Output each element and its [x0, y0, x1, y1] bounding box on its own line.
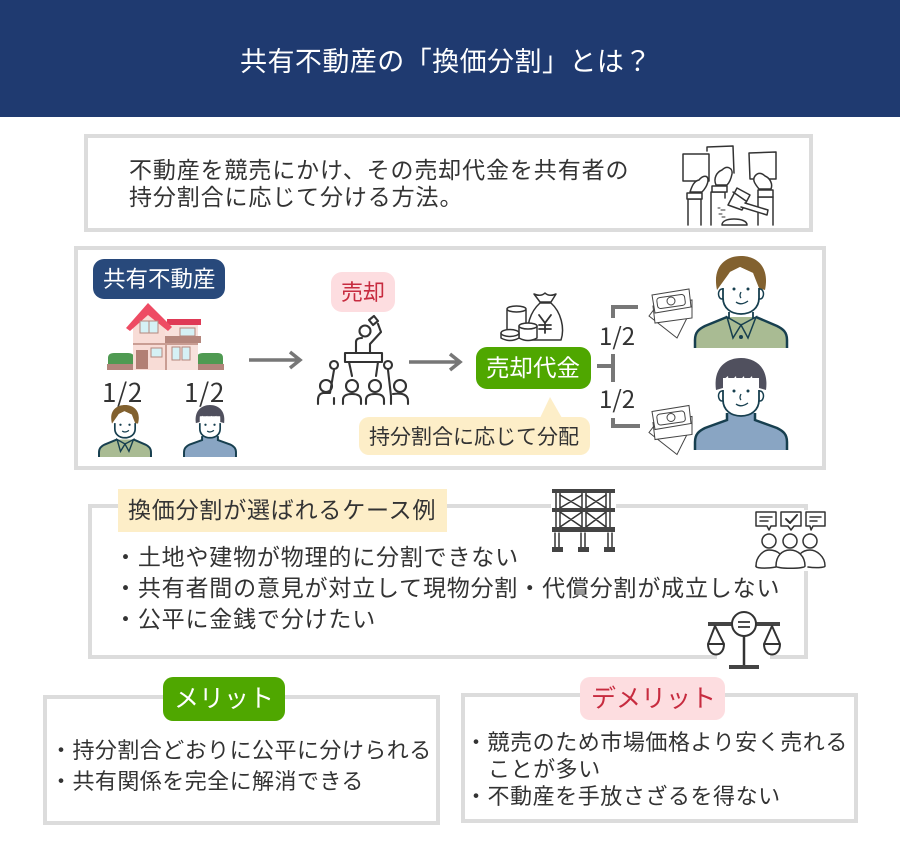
case list [114, 544, 780, 632]
icon: owner B large [695, 358, 787, 450]
icon: people with speech bubbles [754, 510, 828, 571]
share labels [102, 373, 225, 410]
bracket connector [597, 307, 640, 426]
label: co-owned property [93, 259, 225, 299]
icon: banknotes lower [649, 406, 692, 454]
demerit list: ことが多い [488, 757, 601, 782]
share labels: 1/2 [599, 380, 635, 415]
icon: banknotes upper [649, 289, 692, 338]
merit label [163, 677, 285, 721]
icon: small owner A [99, 405, 151, 457]
demerit list: ・競売のため市場価格より安く売れる [465, 730, 848, 755]
label: sale [331, 272, 395, 312]
icon: balance scale [708, 612, 780, 669]
icon: auction crowd [318, 316, 408, 404]
share labels: 1/2 [184, 373, 225, 410]
demerit label [580, 677, 725, 720]
panel: typical cases [90, 489, 828, 669]
title banner [0, 0, 900, 117]
callout: distribute by share [359, 397, 590, 455]
merit list: ・持分割合どおりに公平に分けられる [50, 738, 432, 763]
panel: flow diagram [76, 248, 824, 468]
demerit label: デメリット [591, 685, 716, 713]
case heading [118, 489, 447, 532]
merit list: ・共有関係を完全に解消できる [50, 769, 364, 794]
merit list [50, 738, 432, 794]
icon: small owner B [184, 405, 236, 457]
icon: owner A large [695, 256, 787, 348]
label: sale proceeds [476, 347, 591, 389]
case list: ・公平に金銭で分けたい [114, 606, 376, 632]
merit label: メリット [174, 685, 274, 713]
case list: ・土地や建物が物理的に分割できない [114, 544, 519, 570]
panel: demerits [463, 677, 856, 821]
title banner: 共有不動産の「換価分割」とは？ [240, 47, 652, 77]
icon: raised paddles and gavel [683, 146, 776, 225]
definition text: 持分割合に応じて分ける方法。 [129, 184, 463, 210]
label: sale: 売却 [341, 280, 385, 305]
share labels [599, 317, 635, 415]
definition text [129, 157, 629, 210]
label: sale proceeds: 売却代金 [486, 355, 580, 381]
demerit list [465, 730, 848, 809]
panel: merits [45, 677, 438, 823]
share labels: 1/2 [599, 317, 635, 352]
demerit list: ・不動産を手放さざるを得ない [465, 784, 781, 809]
icon: building frame [551, 489, 616, 552]
share labels: 1/2 [102, 373, 143, 410]
arrow: property to sale [249, 352, 300, 368]
panel: definition [86, 136, 811, 230]
icon: house [107, 303, 224, 370]
arrow: sale to proceeds [409, 354, 460, 370]
callout: distribute by share: 持分割合に応じて分配 [369, 426, 579, 449]
icon: money bag and coins [501, 293, 563, 340]
case heading: 換価分割が選ばれるケース例 [128, 497, 436, 523]
label: co-owned property: 共有不動産 [103, 267, 216, 292]
case list: ・共有者間の意見が対立して現物分割・代償分割が成立しない [114, 575, 780, 601]
definition text: 不動産を競売にかけ、その売却代金を共有者の [129, 157, 629, 183]
